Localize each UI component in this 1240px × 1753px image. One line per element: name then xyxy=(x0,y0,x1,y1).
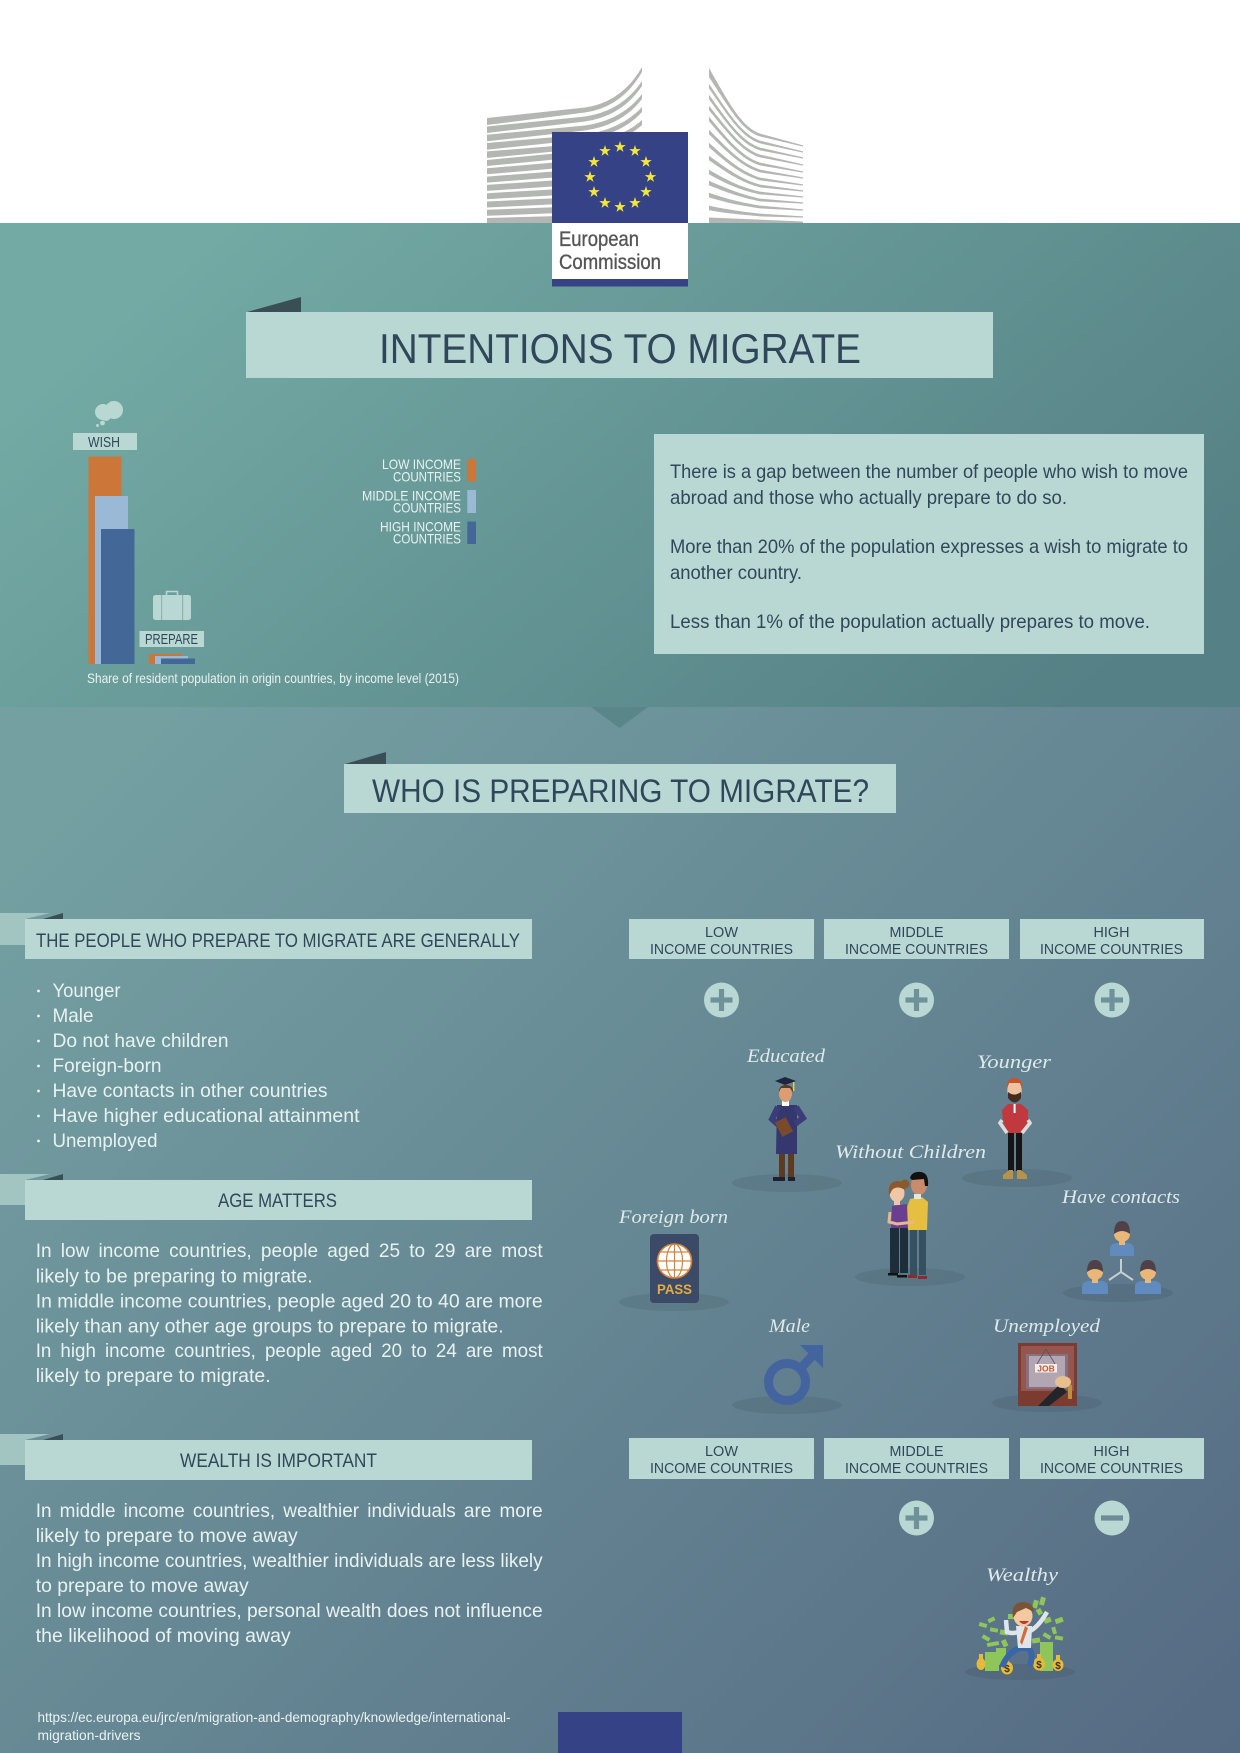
legend: income levels xyxy=(362,456,476,547)
legend: income levels: COUNTRIES xyxy=(393,500,461,516)
footer: blue block xyxy=(558,1712,682,1753)
heading: wealth is important: WEALTH IS IMPORTANT xyxy=(180,1450,377,1472)
logo: European Commission: European xyxy=(559,228,639,251)
source link text: https://ec.europa.eu/jrc/en/migration-and-demography/knowledge/international- xyxy=(38,1709,511,1725)
legend: income levels: HIGH INCOME xyxy=(380,519,461,535)
wish label: WISH xyxy=(88,435,120,451)
heading: the people who prepare: THE PEOPLE WHO PREPARE TO MIGRATE ARE GENERALLY xyxy=(36,930,520,952)
illustration: male symbol: Male xyxy=(768,1316,810,1337)
panel: who is preparing background xyxy=(0,707,1240,1753)
column headers: income groups (top): MIDDLE xyxy=(890,925,944,941)
icons: plus signs (top) xyxy=(704,982,1130,1018)
column headers: income groups (bottom): INCOME COUNTRIES xyxy=(650,1461,793,1477)
illustration: unemployed door: JOB xyxy=(1037,1364,1055,1374)
illustration: wealthy: $ xyxy=(1055,1661,1061,1672)
callout: gap between wish and preparation: abroad and those who actually prepare to do so. xyxy=(670,487,1067,509)
text block: age matters: In middle income countries, people aged 20 to 40 are more xyxy=(36,1291,543,1313)
illustration: wealthy xyxy=(965,1565,1075,1680)
heading: the people who prepare xyxy=(0,913,532,959)
money notes xyxy=(979,1597,1064,1671)
illustration: male symbol xyxy=(732,1316,842,1414)
legend: income levels: LOW INCOME xyxy=(382,456,461,472)
prepare bars xyxy=(149,654,195,664)
illustration: wealthy: $ xyxy=(1004,1664,1010,1675)
illustration: without children: Without Children xyxy=(835,1142,986,1163)
title: intentions to migrate: INTENTIONS TO MIGRATE xyxy=(379,325,861,372)
text block: age matters xyxy=(36,1240,543,1387)
text block: wealth is important: likely to prepare to move away xyxy=(36,1525,298,1547)
text block: age matters: likely than any other age groups to prepare to migrate. xyxy=(36,1316,504,1338)
logo: European Commission xyxy=(552,132,688,286)
illustration: younger: Younger xyxy=(977,1052,1052,1073)
column headers: income groups (bottom): INCOME COUNTRIES xyxy=(845,1461,988,1477)
list: characteristics: Unemployed xyxy=(52,1130,158,1152)
text block: age matters: In high income countries, people aged 20 to 24 are most xyxy=(36,1340,543,1362)
wish bars xyxy=(88,456,134,664)
heading: who is preparing to migrate xyxy=(344,752,896,813)
callout: gap between wish and preparation: There is a gap between the number of people who wish to move xyxy=(670,461,1188,483)
illustration: foreign born passport xyxy=(618,1207,729,1311)
illustration: wealthy: $ xyxy=(1036,1660,1042,1671)
list: characteristics: Have higher educational attainment xyxy=(52,1105,360,1127)
column headers: income groups (top): LOW xyxy=(705,925,738,941)
illustration: educated xyxy=(732,1046,842,1192)
text block: age matters: likely to prepare to migrate. xyxy=(36,1365,271,1387)
legend: income levels: COUNTRIES xyxy=(393,469,461,485)
legend: income levels: COUNTRIES xyxy=(393,531,461,547)
illustration: without children xyxy=(835,1142,986,1286)
icons: plus and minus signs (bottom) xyxy=(899,1500,1130,1536)
callout: gap between wish and preparation xyxy=(654,434,1204,654)
wish label xyxy=(73,433,137,451)
illustration: wealthy: Wealthy xyxy=(986,1565,1059,1586)
prepare label: PREPARE xyxy=(145,632,198,648)
icon: suitcase xyxy=(153,592,191,620)
heading: age matters xyxy=(0,1174,532,1220)
illustration: foreign born passport: Foreign born xyxy=(618,1207,728,1228)
text block: wealth is important: In high income countries, wealthier individuals are less likely xyxy=(36,1550,543,1572)
icon: section pointer notch xyxy=(591,707,648,728)
text block: wealth is important: the likelihood of moving away xyxy=(36,1625,291,1647)
list: characteristics: Have contacts in other countries xyxy=(52,1080,328,1102)
icon: Berlaymont building xyxy=(487,67,803,223)
text block: wealth is important: to prepare to move away xyxy=(36,1575,249,1597)
column headers: income groups (bottom) xyxy=(629,1438,1204,1479)
column headers: income groups (bottom): INCOME COUNTRIES xyxy=(1040,1461,1183,1477)
money bags xyxy=(976,1654,1064,1674)
illustration: educated: Educated xyxy=(746,1046,826,1067)
list: characteristics: Male xyxy=(52,1005,94,1027)
list: characteristics: Foreign-born xyxy=(52,1055,162,1077)
chart caption: Share of resident population in origin countries, by income level (2015) xyxy=(87,670,459,686)
illustration: unemployed door: Unemployed xyxy=(993,1316,1101,1337)
list: characteristics: Do not have children xyxy=(52,1030,228,1052)
man xyxy=(1002,1648,1032,1667)
column headers: income groups (bottom): LOW xyxy=(705,1444,738,1460)
column headers: income groups (bottom): HIGH xyxy=(1094,1444,1130,1460)
icon: thought cloud xyxy=(95,401,123,427)
source link text xyxy=(38,1709,511,1743)
heading: wealth is important xyxy=(0,1434,532,1480)
bar chart: wish versus prepare xyxy=(73,401,459,686)
logo: European Commission: Commission xyxy=(559,251,661,274)
text block: age matters: In low income countries, people aged 25 to 29 are most xyxy=(36,1240,543,1262)
illustration: unemployed door xyxy=(992,1316,1102,1412)
column headers: income groups (top): INCOME COUNTRIES xyxy=(845,942,988,958)
text block: wealth is important: In middle income countries, wealthier individuals are more xyxy=(36,1500,543,1522)
callout: gap between wish and preparation: Less than 1% of the population actually prepares to move. xyxy=(670,611,1150,633)
callout: gap between wish and preparation: More than 20% of the population expresses a wish to migrate to xyxy=(670,536,1188,558)
callout: gap between wish and preparation: another country. xyxy=(670,562,802,584)
list: characteristics xyxy=(37,980,360,1152)
illustration: foreign born passport: PASS xyxy=(657,1282,692,1297)
column headers: income groups (bottom): MIDDLE xyxy=(890,1444,944,1460)
illustration: have contacts: Have contacts xyxy=(1061,1187,1180,1208)
text block: wealth is important xyxy=(36,1500,543,1647)
source link text: migration-drivers xyxy=(38,1727,140,1743)
illustration: have contacts xyxy=(1061,1187,1180,1302)
column headers: income groups (top): HIGH xyxy=(1094,925,1130,941)
heading: who is preparing to migrate: WHO IS PREPARING TO MIGRATE? xyxy=(372,773,869,809)
text block: wealth is important: In low income countries, personal wealth does not influence xyxy=(36,1600,543,1622)
column headers: income groups (top): INCOME COUNTRIES xyxy=(1040,942,1183,958)
heading: age matters: AGE MATTERS xyxy=(218,1190,337,1212)
panel: intentions background xyxy=(0,223,1240,707)
title: intentions to migrate xyxy=(246,297,993,378)
legend: income levels: MIDDLE INCOME xyxy=(362,488,461,504)
column headers: income groups (top): INCOME COUNTRIES xyxy=(650,942,793,958)
column headers: income groups (top) xyxy=(629,919,1204,959)
text block: age matters: likely to be preparing to migrate. xyxy=(36,1266,313,1288)
illustration: younger xyxy=(962,1052,1072,1187)
list: characteristics: Younger xyxy=(52,980,121,1002)
